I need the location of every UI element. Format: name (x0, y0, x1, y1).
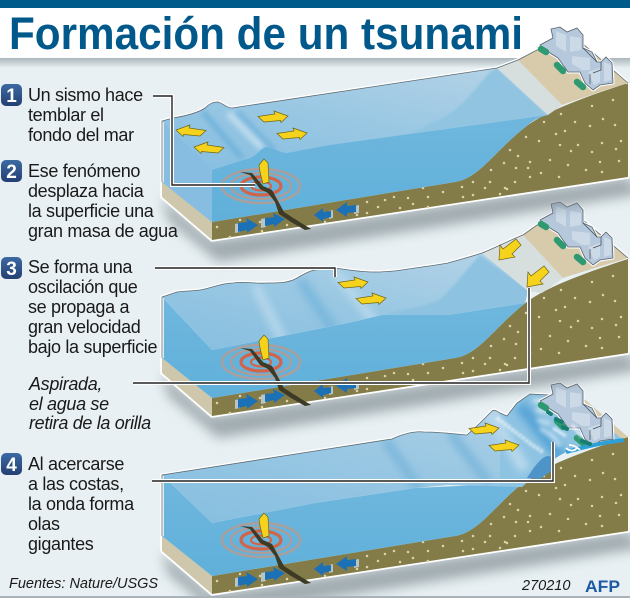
dry sand and soil top (518, 43, 628, 105)
panel: step 1 diagram, earthquake (162, 27, 630, 262)
leader lines (133, 96, 553, 481)
bottom rule (0, 596, 630, 598)
surface wave bands (203, 68, 550, 158)
wet sand (497, 60, 562, 115)
header shadow (0, 58, 630, 68)
text 3: gran velocidad (28, 317, 140, 337)
title: Formación de un tsunami (9, 8, 523, 59)
badge 4: 4 (6, 455, 17, 476)
buildings (540, 202, 613, 265)
AFP logo: AFP (585, 577, 620, 596)
text 3: bajo la superficie (28, 337, 157, 357)
epicentre and fault (222, 159, 311, 230)
text 3: oscilación que (28, 277, 138, 297)
aspirada note: retira de la orilla (29, 413, 151, 433)
step 4 text (1, 453, 135, 554)
epicentre and fault (222, 335, 311, 406)
yellow arrows (338, 239, 549, 304)
aspirada note: Aspirada, (28, 374, 102, 394)
badge 1: 1 (6, 86, 17, 107)
step 1 text (1, 84, 143, 145)
seabed block (162, 259, 630, 438)
wet sand (482, 235, 563, 293)
seabed block (162, 83, 630, 262)
text 2: Ese fenómeno (28, 161, 140, 181)
seabed block (162, 437, 630, 598)
text 1: Un sismo hace (28, 85, 143, 105)
badge 3: 3 (6, 259, 17, 280)
water front face (162, 110, 548, 222)
step 3 text (1, 257, 157, 357)
step 2 text (1, 160, 179, 241)
badge 3 (1, 257, 22, 280)
badge 2: 2 (6, 162, 17, 183)
text 4: la onda forma (28, 494, 135, 514)
back edge halo (162, 219, 628, 358)
side face tint (162, 121, 212, 222)
badge 1 (1, 84, 22, 107)
text 4: olas (28, 514, 60, 534)
water side and front face (162, 297, 528, 398)
text 2: gran masa de agua (28, 221, 179, 241)
text 1: fondo del mar (28, 125, 134, 145)
back corner sand (582, 397, 628, 440)
text 1: temblar el (28, 105, 104, 125)
breaking wave crest (527, 456, 553, 479)
header band (0, 8, 630, 58)
sources: Fuentes: Nature/USGS (9, 576, 158, 592)
text 4: a las costas, (28, 474, 124, 494)
back edge line (162, 219, 628, 358)
text 3: Se forma una (28, 257, 133, 277)
buildings (540, 27, 613, 90)
water front face (162, 475, 528, 576)
text 3: se propaga a (28, 297, 130, 317)
text 4: gigantes (28, 534, 94, 554)
top rule (0, 0, 630, 8)
date code: 270210 (521, 578, 570, 594)
city flooded (540, 383, 613, 446)
yellow arrows (469, 423, 519, 452)
flood foam and drowned trees (548, 412, 624, 452)
surface swell bands (385, 390, 630, 490)
text 2: la superficie una (28, 201, 155, 221)
back edge halo (162, 43, 628, 182)
back edge line (162, 43, 628, 182)
water surface (162, 394, 624, 523)
water surface (162, 253, 528, 350)
water surface (162, 68, 548, 170)
surface swell bands (255, 255, 530, 345)
dry sand and soil top (523, 219, 628, 278)
badge 2 (1, 160, 22, 183)
text 4: Al acercarse (28, 454, 124, 474)
back edge halo (162, 394, 550, 536)
back edge line (162, 394, 550, 536)
yellow arrows (176, 111, 307, 154)
epicentre and fault (222, 513, 311, 584)
text 2: desplaza hacia (28, 181, 145, 201)
panel: step 2 diagram, water withdraws (162, 202, 630, 438)
aspirada note: el agua se (29, 394, 109, 414)
panel: step 3 diagram, coast wave (162, 383, 630, 598)
